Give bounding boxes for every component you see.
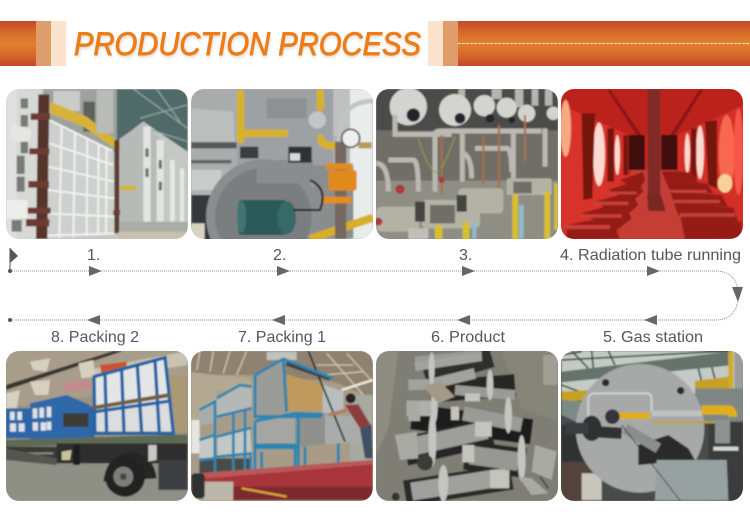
photo 5: gas station burner plate	[560, 345, 745, 502]
top dotted line	[10, 271, 738, 320]
photo 7: workers loading furnace frames	[190, 345, 377, 502]
start flag	[10, 248, 18, 271]
forward arrows	[89, 266, 660, 276]
step labels	[51, 247, 741, 346]
label 8: 8. Packing 2	[51, 329, 139, 346]
label 5: 5. Gas station	[603, 329, 703, 346]
label 4: 4. Radiation tube running	[560, 247, 741, 264]
photo 6: finished burner products	[375, 345, 560, 502]
photo 2: burner blower	[191, 89, 373, 239]
label 6: 6. Product	[431, 329, 506, 346]
photo 1: furnace door	[0, 85, 190, 242]
header band	[0, 21, 750, 66]
title: PRODUCTION PROCESS	[75, 28, 421, 64]
header right ribbon	[428, 21, 750, 66]
title: PRODUCTION PROCESS	[74, 26, 421, 62]
process flow line	[8, 248, 743, 325]
label 3: 3.	[459, 247, 472, 264]
photo 8: truck loaded with furnace frames	[0, 345, 190, 502]
line start dots	[8, 269, 12, 322]
label 2: 2.	[273, 247, 286, 264]
return arrows	[87, 315, 657, 325]
header left ribbon	[0, 21, 66, 66]
photo 4: radiation tube running	[560, 85, 745, 242]
curve arrow	[732, 287, 743, 302]
label 1: 1.	[87, 247, 100, 264]
label 7: 7. Packing 1	[238, 329, 326, 346]
photo 3: gas pipework	[374, 85, 560, 242]
